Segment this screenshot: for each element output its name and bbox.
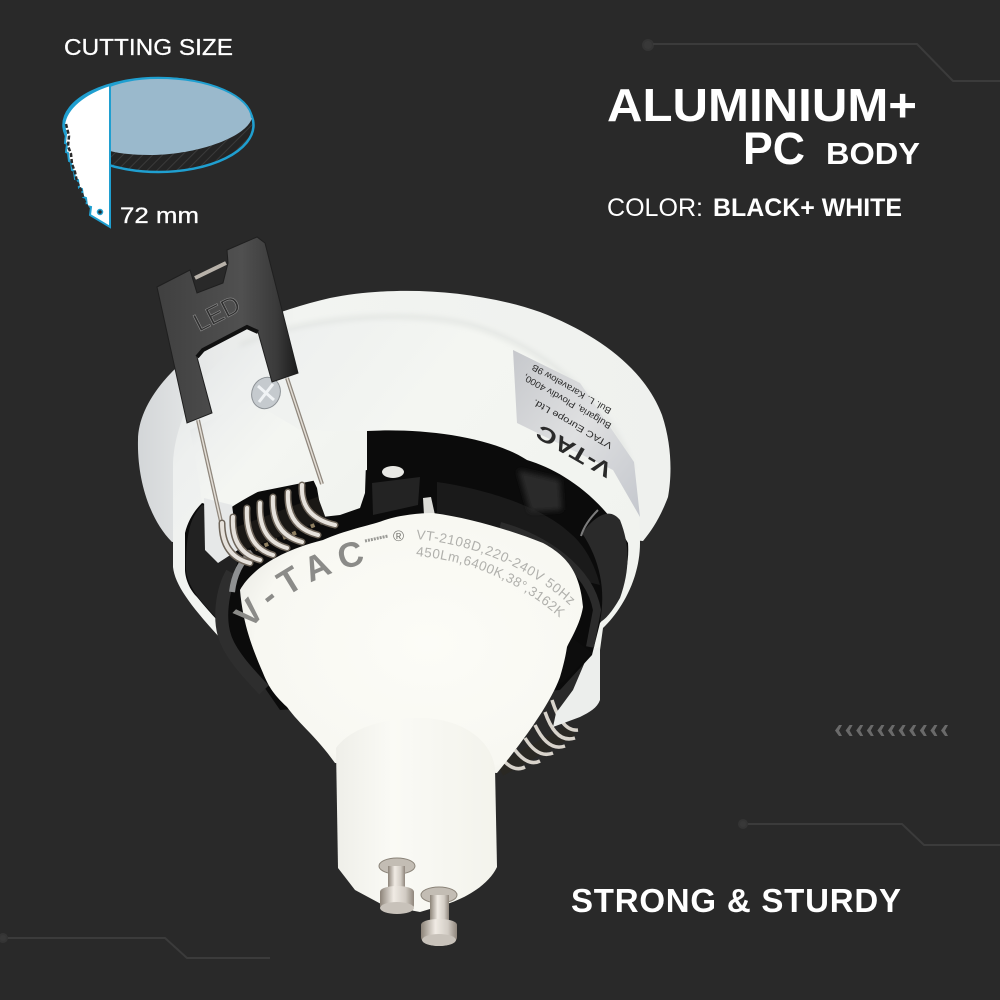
left ring bbox=[222, 573, 264, 690]
title: material: PC bbox=[743, 123, 805, 174]
circuit line: top right bbox=[643, 40, 1000, 81]
title: material: ALUMINIUM+ bbox=[607, 79, 917, 131]
holder tab bbox=[372, 477, 420, 515]
holder glossy streak bbox=[581, 510, 598, 536]
circuit line: lower right bbox=[739, 820, 1000, 845]
ring light edge bbox=[232, 552, 252, 592]
logo small text bbox=[365, 536, 388, 541]
black lamp holder bbox=[185, 430, 628, 710]
embossed LED: LED bbox=[189, 290, 245, 337]
holder highlight bbox=[518, 470, 562, 512]
right spring bracket bbox=[553, 647, 600, 727]
rating label: VTAC Europe Ltd. bbox=[531, 397, 614, 451]
holder left inner shading bbox=[186, 505, 238, 622]
circuit line: bottom left bbox=[0, 934, 270, 958]
icon: hole saw cutting size bbox=[64, 78, 254, 227]
colour line: BLACK+ WHITE bbox=[713, 194, 902, 222]
body front tab bbox=[190, 400, 367, 517]
right ring bbox=[500, 526, 597, 647]
registered mark: ® bbox=[393, 528, 404, 545]
pin 2 bbox=[421, 887, 457, 946]
screw bbox=[247, 373, 285, 413]
holder right inner crescent bbox=[582, 514, 628, 622]
title: material bbox=[607, 79, 920, 174]
bulb printed logo: V-TAC bbox=[232, 542, 363, 623]
left wire 2 bbox=[287, 378, 322, 484]
bulb reflector bbox=[240, 513, 583, 773]
rating label bbox=[513, 350, 640, 517]
outer flange bbox=[138, 291, 670, 542]
black clip bbox=[157, 237, 298, 423]
label text: V-TAC bbox=[532, 420, 616, 482]
GU10 base bbox=[336, 718, 497, 912]
cutting size heading: CUTTING SIZE bbox=[64, 34, 233, 60]
chevron row bbox=[835, 725, 948, 736]
inner body wall bbox=[173, 317, 640, 665]
colour line bbox=[607, 194, 902, 222]
flange edge shading bbox=[240, 317, 632, 470]
notch bbox=[423, 497, 435, 515]
product photo: downlight bbox=[138, 236, 670, 946]
lower right dark lump bbox=[548, 636, 592, 690]
dimension label: 72 mm bbox=[120, 203, 199, 228]
right spring bbox=[500, 700, 578, 770]
left wire 1 bbox=[198, 420, 222, 526]
slogan: STRONG & STURDY bbox=[571, 882, 901, 919]
pin 1 bbox=[379, 858, 415, 914]
colour line: COLOR: bbox=[607, 194, 703, 222]
bulb print line 2: 450Lm,6400K,38°,3162K bbox=[416, 547, 565, 618]
title: material: BODY bbox=[826, 136, 920, 171]
white notch spot bbox=[382, 466, 404, 478]
bulb print line 1: VT-2108D,220-240V 50Hz bbox=[417, 530, 574, 605]
rating label: Bulgaria, Plovdiv 4000, bbox=[521, 372, 613, 431]
rating label: Bul. L. Karavelow 9B bbox=[530, 362, 613, 416]
inner band bbox=[437, 482, 600, 585]
wire-side tab bbox=[204, 498, 238, 563]
main spring bbox=[222, 485, 335, 563]
